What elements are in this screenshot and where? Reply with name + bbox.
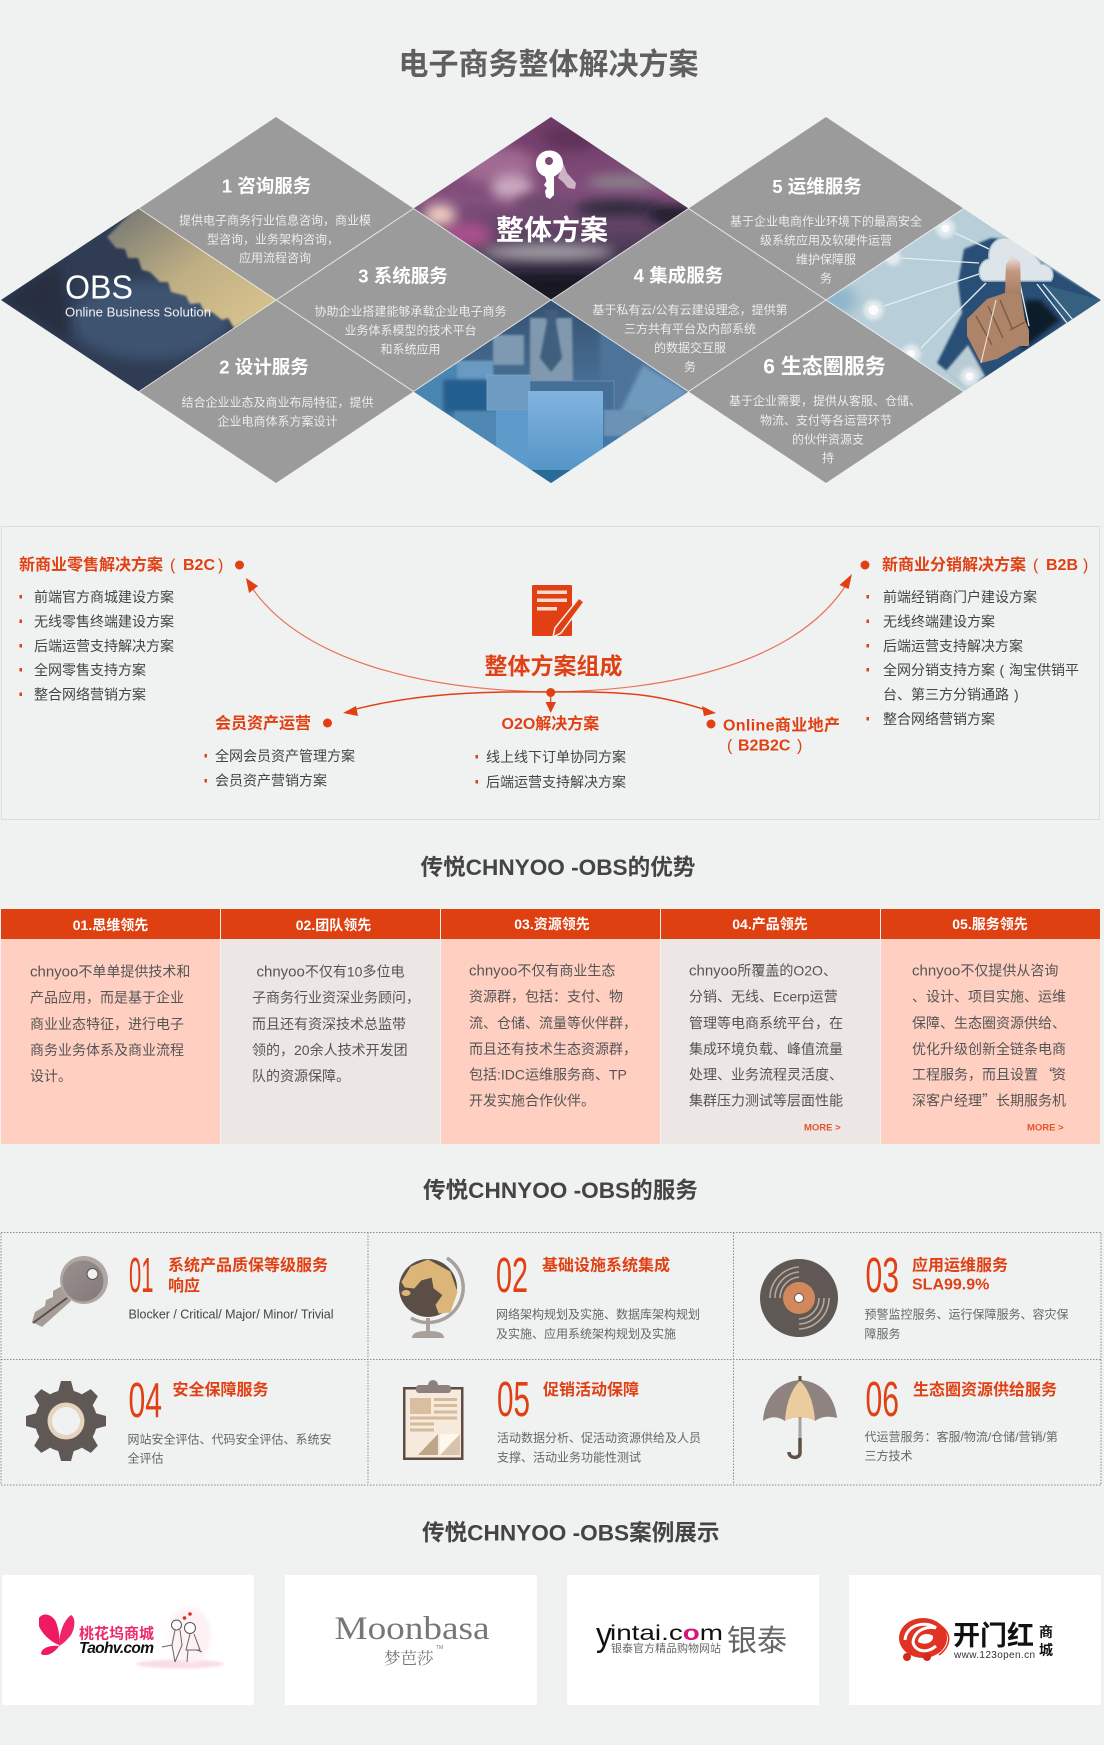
column 03: [441, 909, 660, 1144]
glowing nodes: [864, 219, 978, 386]
left list: B2C: ): [218, 557, 223, 574]
member assets list: 全网会员资产管理方案: [215, 748, 355, 764]
column 05: MORE >: [1027, 1122, 1064, 1134]
service 04: 网站安全评估、代码安全评估、系统安: [128, 1432, 332, 1446]
panel: 5 operations service: 级系统应用及软硬件运营: [760, 232, 892, 248]
column 02: 子商务行业资深业务顾问，: [252, 988, 420, 1008]
service 06: [763, 1373, 1058, 1463]
panel: 3 system service: 和系统应用: [380, 342, 441, 356]
panel: 2 design service: 企业电商体系方案设计: [217, 414, 338, 428]
column 05: [881, 909, 1100, 1144]
column 02: 02.团队领先: [296, 917, 371, 933]
panel: 4 integration service: 4 集成服务: [634, 265, 723, 286]
service 02: 基础设施系统集成: [542, 1256, 670, 1274]
column 04: 04.产品领先: [732, 916, 808, 932]
logo card: Moonbasa: Moonbasa: [334, 1611, 490, 1647]
column 02: chnyoo不仅有10多位电: [256, 964, 404, 980]
column 03: 流、仓储、流量等伙伴群，: [469, 1013, 637, 1033]
panel: 6 ecosystem service: 6 生态圈服务: [763, 354, 886, 378]
service 03: 障服务: [864, 1326, 901, 1341]
left list: B2C: 无线零售终端建设方案: [34, 614, 174, 630]
panel: 5 operations service: 维护保障服: [796, 252, 856, 266]
icon: umbrella: [763, 1376, 837, 1457]
O2O list: [476, 714, 626, 790]
Online commercial property: Online商业地产: [723, 716, 840, 734]
panel: 6 ecosystem service: 的伙伴资源支: [792, 432, 864, 446]
column 02: [221, 909, 440, 1144]
column 04: 集成环境负载、峰值流量: [689, 1041, 843, 1057]
service 05: 05: [497, 1373, 530, 1427]
column 03: 包括:IDC运维服务商、TP: [469, 1066, 627, 1082]
right list: B2B: 无线终端建设方案: [883, 614, 995, 630]
Online commercial property: [706, 716, 840, 754]
logo card: 123open: 商: [1039, 1624, 1053, 1640]
network lines: [884, 233, 1073, 348]
column 04: MORE >: [804, 1122, 841, 1134]
service 03: [760, 1249, 1069, 1341]
panel: 6 ecosystem service: 基于企业需要，提供从客服、仓储、: [729, 392, 921, 409]
right list: B2B: 台、第三方分销通路: [883, 686, 1009, 702]
column 03: chnyoo不仅有商业生态: [469, 962, 615, 980]
title: 电子商务整体解决方案: [398, 48, 698, 82]
panel: 4 integration service: 务: [684, 359, 696, 374]
panel: 2 design service: 2 设计服务: [219, 356, 309, 378]
panel: 5 operations service: 基于企业电商作业环境下的最高安全: [730, 214, 922, 228]
icon: document and pen: [532, 585, 584, 637]
member assets list: 会员资产运营: [215, 714, 311, 732]
heart mark: [39, 1615, 74, 1655]
couple illustration: [136, 1607, 224, 1668]
service 02: 及实施、应用系统架构规划及实施: [496, 1326, 676, 1341]
column 01: 设计。: [30, 1068, 72, 1084]
panel: 3 system service: 3 系统服务: [358, 266, 448, 286]
service 04: [26, 1374, 332, 1466]
column 03: 03.资源领先: [514, 916, 590, 932]
column 03: 开发实施合作伙伴。: [469, 1092, 595, 1108]
left list: B2C: 全网零售支持方案: [34, 662, 146, 678]
panel: 5 operations service: 务: [820, 270, 832, 286]
service 02: [399, 1249, 700, 1341]
service 06: 三方技术: [864, 1448, 913, 1463]
column 05: 优化升级创新全链条电商: [912, 1041, 1066, 1057]
O2O list: 后端运营支持解决方案: [486, 774, 626, 790]
panel: 4 integration service: 基于私有云/公有云建设理念，提供第: [592, 301, 788, 318]
right list: B2B: B2B: [1046, 557, 1078, 574]
overall solution heading: 整体方案: [496, 214, 608, 246]
right list: B2B: 全网分销支持方案: [883, 662, 995, 678]
right list: B2B: 新商业分销解决方案: [882, 557, 1026, 574]
right list: B2B: ): [1014, 686, 1019, 702]
section heading: services: 传悦CHNYOO -OBS的服务: [423, 1178, 698, 1203]
right list: B2B: 前端经销商门户建设方案: [883, 589, 1037, 605]
icon: gear: [26, 1381, 106, 1461]
panel: 2 design service: [139, 300, 414, 483]
right list: B2B: 淘宝供销平: [1009, 662, 1079, 678]
panel: 3 system service: [276, 208, 551, 392]
logo card: 123open: [849, 1575, 1101, 1705]
column 05: 05.服务领先: [952, 916, 1028, 932]
left list: B2C: B2C: [183, 557, 215, 574]
service 01: 系统产品质保等级服务: [168, 1256, 328, 1274]
right list: B2B: ): [1083, 557, 1088, 574]
service 01: 01: [129, 1249, 154, 1303]
services grid: [1, 1232, 1101, 1485]
column 05: chnyoo不仅提供从咨询: [912, 962, 1058, 980]
O2O list: O2O解决方案: [502, 714, 599, 733]
panel: office image diamond: [410, 298, 692, 486]
OBS heading: OBS: [65, 268, 133, 306]
service 05: 促销活动保障: [543, 1380, 639, 1399]
suit, shirt, tie: [599, 333, 687, 438]
panel: 1 consulting service: [139, 117, 414, 300]
left list: B2C: 前端官方商城建设方案: [34, 589, 174, 605]
column 01: 商务业务体系及商业流程: [30, 1042, 184, 1058]
column 03: 而且还有技术生态资源群，: [469, 1039, 637, 1059]
service 01: [32, 1249, 334, 1327]
right list: B2B: (: [1000, 662, 1004, 678]
Online commercial property: B2B2C: [738, 738, 791, 754]
member assets list: 会员资产营销方案: [215, 772, 327, 788]
service 06: 代运营服务：客服/物流/仓储/营销/第: [864, 1428, 1058, 1445]
section heading: advantages: 传悦CHNYOO -OBS的优势: [420, 855, 695, 880]
member assets list: [204, 714, 355, 788]
column 04: [661, 909, 880, 1144]
service 01: 响应: [168, 1276, 200, 1295]
column 05: 深客户经理”长期服务机: [912, 1090, 1066, 1110]
service 04: 全评估: [128, 1450, 164, 1466]
panel: cloud image diamond: [813, 206, 1104, 396]
icon: key: [32, 1256, 108, 1327]
logo card: 123open: 城: [1039, 1642, 1053, 1658]
panel: 1 consulting service: 1 咨询服务: [222, 176, 311, 196]
column 02: 领的，20余人技术开发团: [252, 1040, 408, 1060]
Online commercial property: (: [727, 738, 733, 754]
left list: B2C: 整合网络营销方案: [34, 686, 146, 702]
column 04: 分销、无线、Ecerp运营: [689, 988, 838, 1004]
thin white diamond seams: [139, 208, 964, 392]
logo card: Moonbasa: [285, 1575, 537, 1705]
panel: 6 ecosystem service: 物流、支付等各运营环节: [760, 412, 892, 428]
service 04: 04: [128, 1374, 162, 1428]
right list: B2B: [860, 555, 1088, 727]
torso: [937, 238, 1104, 385]
column 05: 、设计、项目实施、运维: [912, 988, 1066, 1004]
icon: clipboard: [403, 1380, 464, 1460]
right list: B2B: 整合网络营销方案: [883, 711, 995, 727]
column 03: 资源群，包括：支付、物: [469, 986, 623, 1006]
left list: B2C: 新商业零售解决方案: [19, 557, 163, 574]
logo card: Yintai: intai.c om: [610, 1622, 723, 1645]
service 02: 02: [496, 1249, 528, 1303]
panel: 2 design service: 结合企业业态及商业布局特征，提供: [181, 394, 374, 410]
cloud: [979, 238, 1053, 281]
panel: 4 integration service: [551, 208, 826, 392]
service 03: 03: [866, 1249, 899, 1303]
service 03: 预警监控服务、运行保障服务、容灾保: [864, 1306, 1069, 1322]
column 05: 保障、生态圈资源供给、: [912, 1015, 1066, 1031]
service 06: 06: [866, 1373, 899, 1427]
panel: 6 ecosystem service: 持: [822, 450, 834, 465]
panel: 4 integration service: 三方共有平台及内部系统: [624, 321, 756, 336]
column 01: 产品应用，而是基于企业: [30, 988, 184, 1008]
arrows: curves from central node: [246, 574, 852, 716]
column 04: 处理、业务流程灵活度、: [689, 1066, 843, 1082]
column 01: [1, 909, 220, 1144]
service 05: [403, 1373, 701, 1464]
panel: OBS image diamond: [0, 205, 280, 395]
logo card: Taohv: Taohv.com: [79, 1640, 154, 1657]
service 05: 活动数据分析、促活动资源供给及人员: [497, 1430, 701, 1445]
panel: 4 integration service: 的数据交互服: [654, 340, 726, 355]
column 01: chnyoo不单单提供技术和: [30, 964, 190, 980]
panel: overall solution composition: [2, 526, 1100, 820]
logo card: Moonbasa: TM: [436, 1645, 443, 1651]
service 05: 支撑、活动业务功能性测试: [497, 1450, 641, 1464]
OBS subtitle: Online Business Solution: [65, 304, 211, 320]
column 01: 01.思维领先: [73, 917, 148, 933]
right list: B2B: (: [1033, 557, 1039, 574]
panel: 5 operations service: 5 运维服务: [772, 176, 862, 197]
panel: overall solution image diamond: [410, 115, 699, 305]
Online commercial property: ): [797, 738, 802, 754]
panel: 1 consulting service: 应用流程咨询: [239, 250, 311, 265]
column 04: 集群压力测试等层面性能: [689, 1092, 843, 1108]
left list: B2C: 后端运营支持解决方案: [34, 638, 174, 654]
panel: 5 operations service: [688, 117, 964, 300]
logo card: 123open: 开门红: [953, 1621, 1034, 1651]
column 05: 工程服务，而且设置“资: [912, 1064, 1066, 1084]
icon: globe: [399, 1258, 463, 1338]
case logos: [2, 1575, 1101, 1705]
panel: 3 system service: 协助企业搭建能够承载企业电子商务: [314, 304, 507, 318]
panel: 1 consulting service: 型咨询，业务架构咨询，: [207, 230, 339, 248]
icon: record: [760, 1259, 838, 1337]
panel: 6 ecosystem service: [688, 300, 964, 483]
column 04: chnyoo所覆盖的O2O、: [689, 962, 837, 980]
logo card: Yintai: 银泰: [727, 1625, 787, 1658]
hand: [967, 256, 1029, 363]
logo card: Yintai: [567, 1575, 819, 1705]
right list: B2B: 后端运营支持解决方案: [883, 638, 1023, 654]
logo card: Yintai: y: [596, 1616, 612, 1654]
column 02: 队的资源保障。: [252, 1068, 350, 1084]
left desk items: [413, 361, 493, 411]
logo card: Taohv: [2, 1575, 254, 1705]
advantages table: [1, 909, 1100, 1144]
column 01: 商业业态特征，进行电子: [30, 1014, 184, 1034]
logo card: Yintai: 银泰官方精品购物网站: [611, 1641, 721, 1655]
section heading: cases: 传悦CHNYOO -OBS案例展示: [422, 1520, 720, 1546]
O2O list: 线上线下订单协同方案: [486, 749, 626, 765]
icon: white keys: [536, 150, 576, 199]
logo card: Moonbasa: 梦芭莎: [384, 1645, 434, 1669]
column 04: 管理等电商系统平台，在: [689, 1013, 843, 1033]
left list: B2C: (: [170, 557, 176, 574]
service 06: 生态圈资源供给服务: [913, 1380, 1057, 1399]
laptop: [530, 381, 614, 411]
left list: B2C: [19, 555, 244, 702]
service 04: 安全保障服务: [172, 1380, 269, 1399]
panel: 3 system service: 业务体系模型的技术平台: [344, 322, 477, 338]
service 01: Blocker / Critical/ Major/ Minor/ Trivial: [128, 1308, 334, 1322]
column 02: 而且还有资深技术总监带: [252, 1016, 406, 1032]
swirl mark: [899, 1618, 949, 1661]
service 03: 应用运维服务: [912, 1256, 1008, 1274]
composition heading: 整体方案组成: [484, 653, 622, 679]
service 03: SLA99.9%: [912, 1276, 989, 1294]
panel: 1 consulting service: 提供电子商务行业信息咨询，商业模: [179, 212, 371, 228]
logo card: Taohv: 桃花坞商城: [79, 1624, 154, 1642]
logo card: 123open: www.123open.cn: [953, 1650, 1035, 1661]
service 02: 网络架构规划及实施、数据库架构规划: [496, 1306, 700, 1322]
diamond matrix: [0, 115, 1104, 486]
